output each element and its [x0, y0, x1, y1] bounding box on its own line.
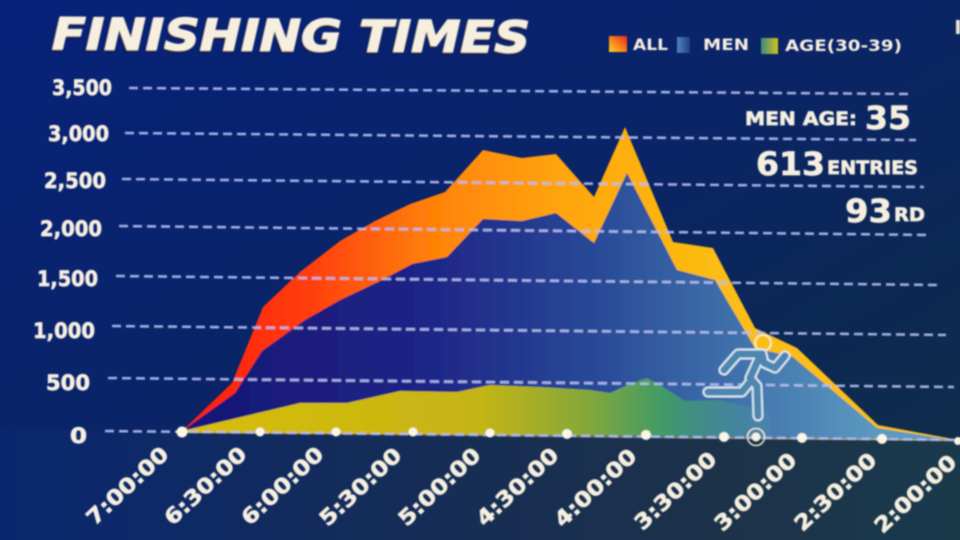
area: age 30-39	[182, 378, 770, 437]
x-axis labels: 3:30:00	[630, 447, 721, 535]
legend label: age 30-39: AGE(30-39)	[785, 36, 902, 55]
y-axis labels: 0	[70, 424, 87, 448]
x-axis labels: 6:30:00	[160, 442, 251, 530]
legend	[609, 35, 902, 55]
area chart	[182, 127, 953, 441]
callout: runner stats	[745, 99, 925, 230]
area: all finishers	[182, 127, 953, 441]
legend label: all: ALL	[633, 35, 668, 54]
legend label: men: MEN	[703, 35, 749, 54]
stat: age value: 35	[865, 99, 911, 137]
x-axis labels: 2:30:00	[790, 448, 881, 536]
legend swatch: age	[761, 38, 778, 54]
y-axis labels: 1,500	[37, 267, 98, 291]
x-axis labels: 4:00:00	[550, 444, 641, 532]
y-axis labels	[33, 76, 112, 448]
x-axis labels: 2:00:00	[870, 450, 960, 538]
y-axis labels: 3,500	[52, 76, 112, 100]
x-axis labels: 7:00:00	[82, 442, 173, 530]
lower background band	[0, 430, 960, 540]
x-axis labels	[82, 442, 960, 538]
icon: runner	[708, 335, 785, 416]
stat: rank suffix: RD	[894, 204, 925, 226]
x-axis labels: 5:30:00	[315, 443, 406, 531]
y-axis labels: 1,000	[33, 319, 95, 343]
y-axis labels: 3,000	[48, 122, 109, 146]
legend swatch: all	[609, 36, 627, 52]
stat: entries value: 613	[756, 145, 825, 183]
y-axis labels: 500	[46, 371, 90, 395]
horizontal gridlines	[105, 88, 960, 440]
marker: ringed point at runner's time	[748, 428, 764, 446]
x-axis labels: 4:30:00	[472, 443, 563, 531]
y-axis labels: 2,500	[44, 169, 106, 193]
title: FINISHING TIMES	[52, 9, 530, 63]
area: men	[182, 173, 953, 440]
page edge mark	[956, 20, 960, 34]
legend swatch: men	[677, 37, 690, 53]
stat: rank value: 93	[845, 192, 892, 230]
x-axis labels: 5:00:00	[394, 443, 485, 531]
y-axis labels: 2,000	[40, 217, 102, 241]
stat: entries label: ENTRIES	[827, 157, 918, 179]
stat: men age: MEN AGE:	[745, 108, 857, 130]
x-axis labels: 3:00:00	[710, 448, 801, 536]
x-axis labels: 6:00:00	[237, 442, 328, 530]
x-axis dots	[176, 426, 960, 445]
